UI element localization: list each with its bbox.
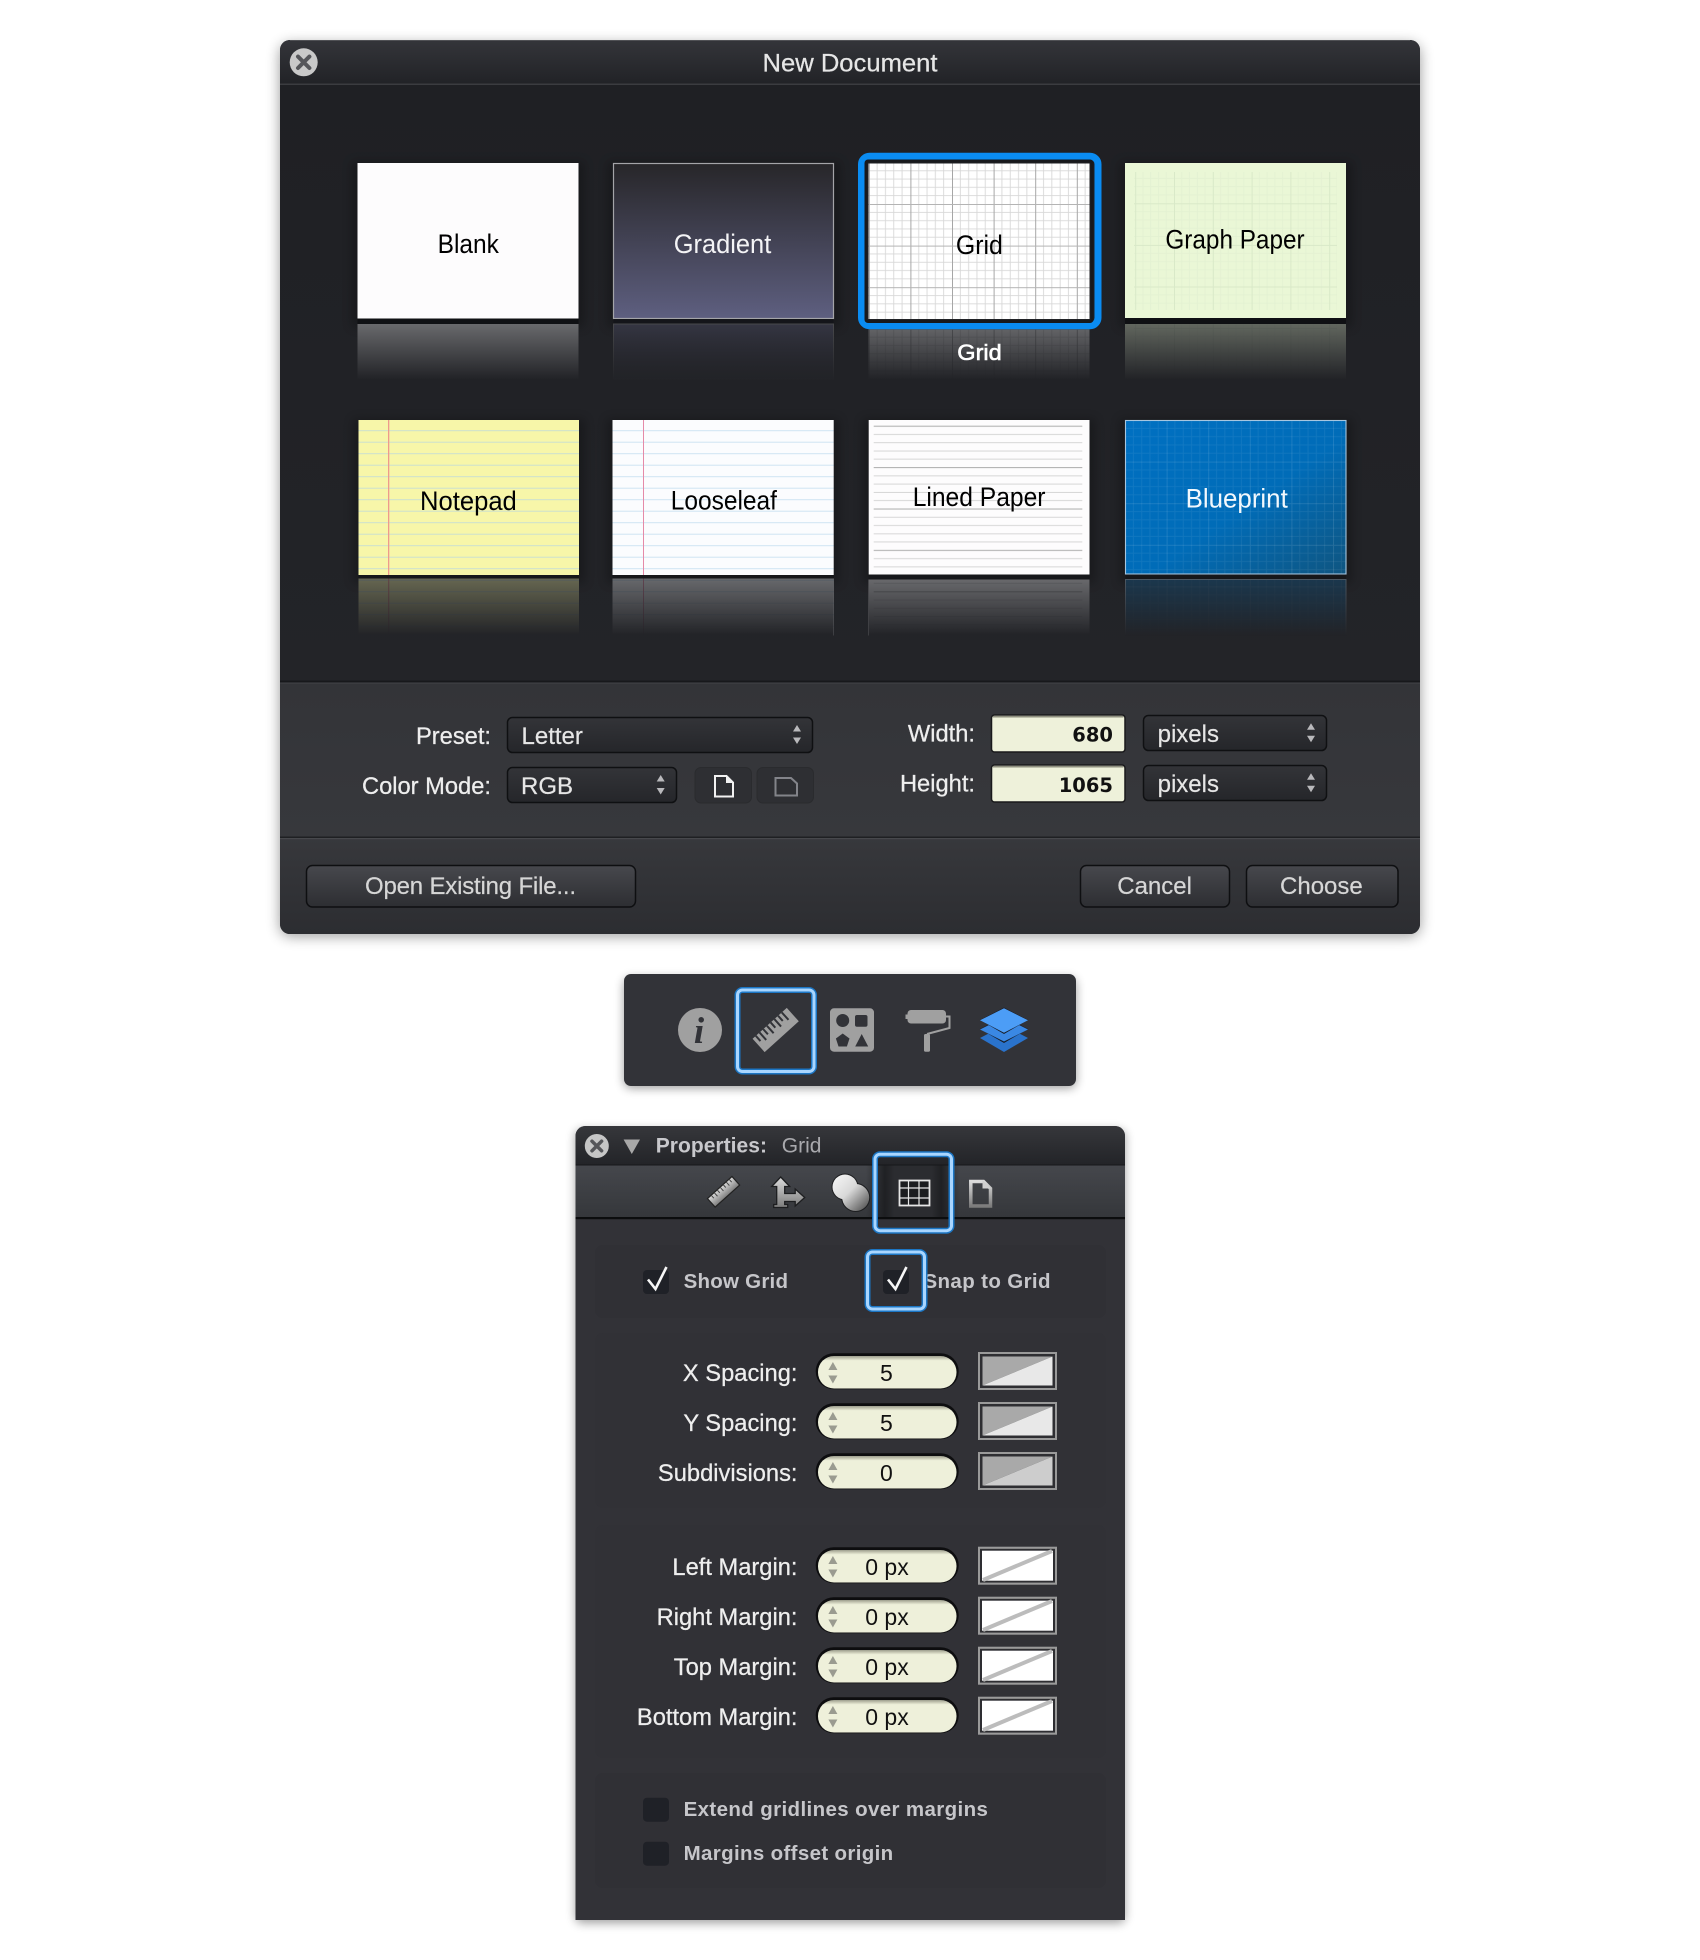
- template: Gradient: [608, 162, 840, 380]
- row: Left Margin: [672, 1547, 1056, 1584]
- row: Top Margin: Top Margin:: [674, 1655, 798, 1681]
- template: Grid (selected): Grid: [956, 230, 1003, 260]
- icon: shapes: [830, 1008, 874, 1052]
- template: Blueprint: Blueprint: [1186, 483, 1288, 513]
- row: Top Margin: [674, 1647, 1056, 1684]
- checkbox: Margins offset origin: Margins offset origin: [684, 1842, 893, 1865]
- title bar: [280, 40, 1420, 85]
- template: Graph Paper: [1120, 162, 1352, 379]
- template: Looseleaf: [607, 419, 839, 636]
- icon: close: [585, 1134, 609, 1158]
- field: Width: [908, 715, 1326, 752]
- field: Color Mode: RGB: [521, 773, 573, 800]
- toolbar: property tabs: [576, 1154, 1125, 1231]
- template: Blueprint: [1120, 419, 1352, 636]
- field: Preset: Letter: [522, 723, 583, 750]
- button: landscape orientation: [757, 768, 814, 803]
- panel: Properties Grid: [576, 1126, 1125, 1923]
- row: Bottom Margin: [637, 1697, 1056, 1734]
- panel: template gallery: [280, 85, 1420, 681]
- template: Graph Paper: Graph Paper: [1165, 224, 1305, 254]
- row: Subdivisions: [658, 1453, 1056, 1489]
- icon: layers: [980, 1008, 1028, 1052]
- selection ring: [862, 156, 1098, 326]
- button: Cancel: Cancel: [1117, 873, 1192, 900]
- panel: New Document dialog: [280, 40, 1420, 936]
- field: Height: Height:: [900, 772, 975, 798]
- row: Subdivisions: Subdivisions:: [658, 1461, 798, 1487]
- template: Notepad: Notepad: [420, 486, 517, 516]
- icon: disclosure triangle: [624, 1140, 640, 1154]
- checkbox: Snap to Grid: Snap to Grid: [924, 1270, 1050, 1293]
- group: grid toggles: [595, 1245, 1106, 1318]
- template: Lined Paper: [863, 419, 1095, 636]
- template: Grid (selected): [862, 156, 1098, 379]
- checkbox: Snap to Grid: [868, 1252, 1050, 1309]
- field: Width: pixels: [1158, 721, 1219, 748]
- row: Subdivisions: 0: [880, 1460, 893, 1486]
- field: Preset: Preset:: [416, 724, 491, 750]
- row: Right Margin: Right Margin:: [657, 1605, 798, 1631]
- row: Right Margin: [657, 1597, 1056, 1634]
- selected template caption: Grid: [957, 340, 1002, 365]
- tab highlight ring: [875, 1154, 952, 1231]
- row: Left Margin: Left Margin:: [672, 1555, 798, 1581]
- field: Width: 680: [1072, 724, 1113, 747]
- heading: New Document: New Document: [762, 50, 938, 78]
- row: X Spacing: [683, 1353, 1056, 1389]
- field: Height: 1065: [1059, 774, 1113, 797]
- icon: pathfinder circles: [832, 1174, 869, 1211]
- subheading: Grid: Grid: [782, 1134, 821, 1158]
- field: Width: Width:: [908, 722, 975, 748]
- panel: document settings: [280, 680, 1420, 838]
- row: X Spacing: X Spacing:: [683, 1361, 798, 1387]
- title bar: [576, 1126, 1125, 1166]
- row: Bottom Margin: 0 px: [865, 1704, 909, 1730]
- template: Blank: [352, 162, 584, 379]
- field: Color Mode: [362, 768, 676, 802]
- field: Color Mode: Color Mode:: [362, 774, 491, 800]
- icon: info: i: [694, 1011, 705, 1052]
- field: Preset: [416, 718, 812, 752]
- template: Notepad: [353, 419, 585, 636]
- icon: dialog close button: [290, 48, 318, 76]
- template: Blank: Blank: [438, 229, 499, 259]
- row: Top Margin: 0 px: [865, 1654, 909, 1680]
- button: portrait orientation: [695, 768, 752, 803]
- row: Left Margin: 0 px: [865, 1554, 909, 1580]
- icon: grid tab: [900, 1180, 930, 1206]
- row: Y Spacing: [683, 1403, 1056, 1439]
- button: Open Existing File: [306, 866, 636, 907]
- button: Cancel: [1080, 866, 1230, 907]
- button: Open Existing File: Open Existing File...: [365, 873, 576, 900]
- icon: ruler (selected): [738, 990, 814, 1072]
- panel: inspector toolbar: [624, 974, 1076, 1088]
- checkbox: Show Grid: Show Grid: [684, 1270, 788, 1293]
- field: Height: [900, 765, 1326, 802]
- heading: Properties: Properties:: [656, 1134, 767, 1158]
- checkbox: Extend gridlines over margins: Extend gridlines over margins: [684, 1798, 988, 1821]
- row: Right Margin: 0 px: [865, 1604, 909, 1630]
- checkbox: Show Grid: [643, 1267, 788, 1294]
- icon: info: [678, 1008, 722, 1052]
- template: Lined Paper: Lined Paper: [913, 482, 1046, 512]
- group: margin options: [595, 1773, 1106, 1888]
- panel: dialog actions: [280, 836, 1420, 934]
- group: margins: [595, 1525, 1106, 1758]
- row: Y Spacing: Y Spacing:: [683, 1411, 798, 1437]
- button: Choose: [1246, 866, 1398, 907]
- row: Bottom Margin: Bottom Margin:: [637, 1705, 798, 1731]
- row: X Spacing: 5: [880, 1360, 893, 1386]
- template: Looseleaf: Looseleaf: [671, 485, 777, 515]
- icon: position arrows: [772, 1177, 805, 1208]
- icon: document tab: [971, 1180, 991, 1206]
- icon: paint roller: [906, 1010, 950, 1052]
- icon: size ruler: [707, 1176, 740, 1207]
- template: Gradient: Gradient: [674, 229, 772, 259]
- group: grid spacing: [595, 1333, 1106, 1508]
- field: Height: pixels: [1158, 771, 1219, 798]
- row: Y Spacing: 5: [880, 1410, 893, 1436]
- button: Choose: Choose: [1280, 873, 1363, 900]
